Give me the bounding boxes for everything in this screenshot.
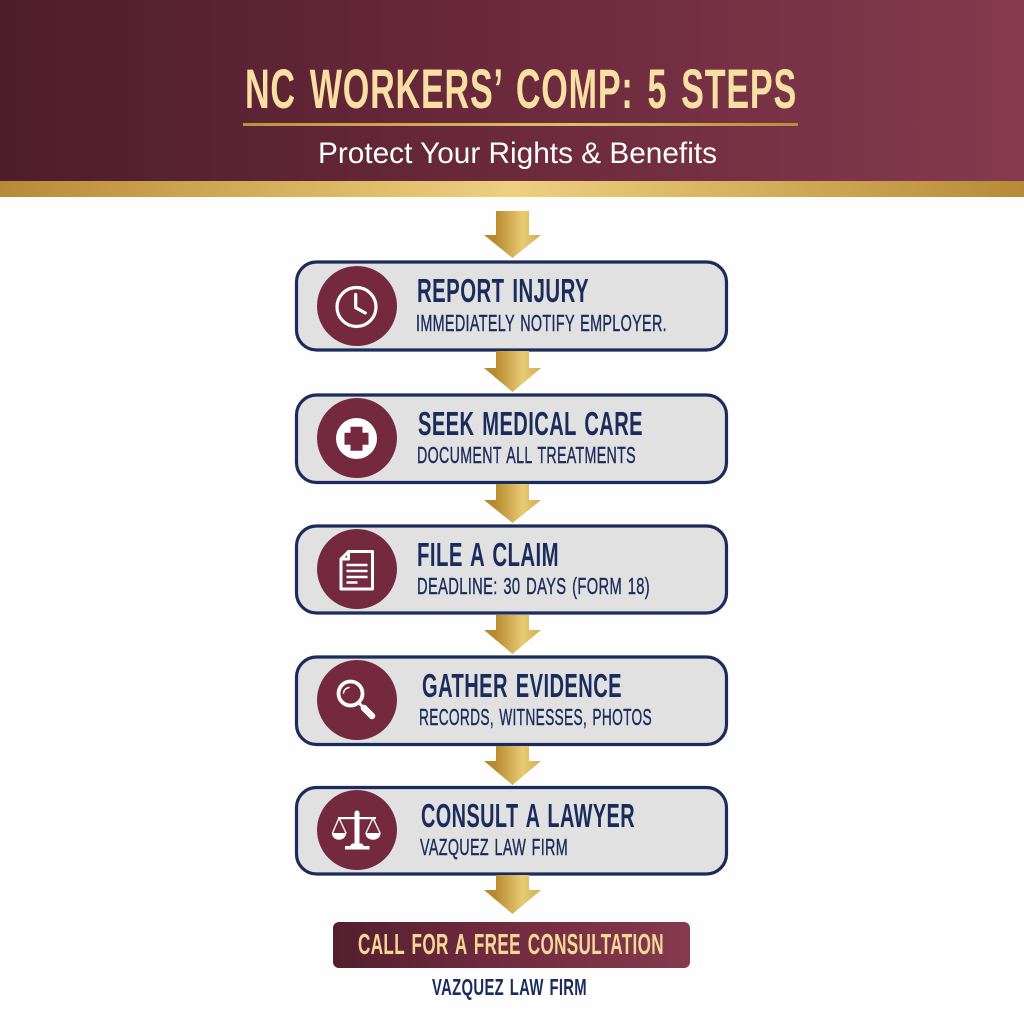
step 3: file a claim — [296, 526, 726, 613]
icon: scales of justice — [317, 790, 397, 870]
icon: document — [317, 529, 397, 609]
icon: medical cross — [317, 398, 397, 478]
subtitle: Protect Your Rights & Benefits — [318, 137, 717, 170]
step 5 detail: VAZQUEZ LAW FIRM — [420, 834, 568, 860]
arrow: step 4 to 5 — [484, 746, 541, 785]
call to action button — [333, 922, 690, 968]
step 5: consult a lawyer — [296, 788, 726, 874]
arrow: into step 1 — [484, 211, 541, 258]
step 2: seek medical care — [296, 395, 726, 482]
arrow: step 2 to 3 — [484, 484, 541, 523]
step 3 heading: FILE A CLAIM — [417, 536, 559, 573]
icon: clock — [317, 266, 397, 346]
step 4 heading: GATHER EVIDENCE — [422, 667, 622, 704]
header banner — [0, 0, 1024, 197]
step 1 detail: IMMEDIATELY NOTIFY EMPLOYER. — [416, 310, 667, 336]
step 3 detail: DEADLINE: 30 DAYS (FORM 18) — [417, 573, 650, 599]
step 2 detail: DOCUMENT ALL TREATMENTS — [417, 442, 636, 468]
call to action button: CALL FOR A FREE CONSULTATION — [358, 929, 664, 961]
step 1: report injury — [296, 262, 726, 350]
arrow: step 3 to 4 — [484, 615, 541, 654]
step 1 heading: REPORT INJURY — [417, 272, 589, 309]
arrow: step 5 to call to action — [484, 875, 541, 914]
footer firm name: VAZQUEZ LAW FIRM — [432, 974, 587, 1000]
step 2 heading: SEEK MEDICAL CARE — [418, 405, 643, 442]
step 5 heading: CONSULT A LAWYER — [421, 797, 635, 834]
arrow: step 1 to 2 — [484, 351, 541, 392]
step 4 detail: RECORDS, WITNESSES, PHOTOS — [419, 704, 652, 730]
icon: magnifying glass — [317, 660, 397, 740]
step 4: gather evidence — [296, 657, 726, 744]
